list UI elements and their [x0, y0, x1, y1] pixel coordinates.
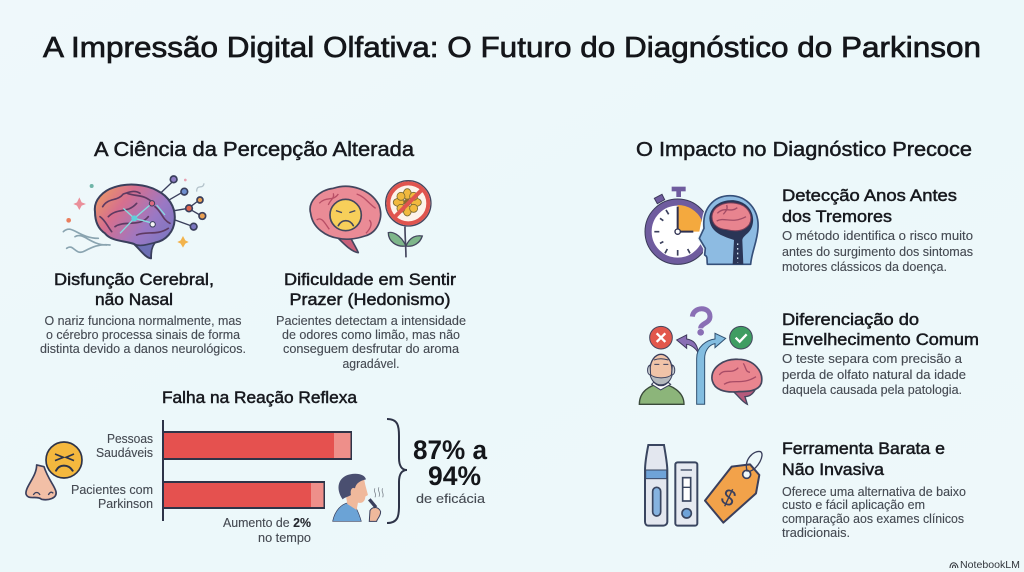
- text: diferenciação do envelhecimento: Envelhecimento Comum: [782, 330, 979, 349]
- annotation: aumento de 2% no tempo: [223, 516, 311, 545]
- icon: disgusted face and nose: [26, 442, 82, 500]
- category labels: [71, 432, 153, 511]
- category labels: Pacientes com: [71, 483, 153, 497]
- title: A Impressão Digital Olfativa: O Futuro do Diagnóstico do Parkinson: [43, 32, 981, 64]
- text: detecção anos antes: Detecção Anos Antes: [782, 186, 957, 205]
- text: dificuldade em sentir prazer: de odores como limão, mas não: [282, 328, 460, 342]
- text: diferenciação do envelhecimento: daquela causada pela patologia.: [782, 383, 962, 397]
- category labels: Parkinson: [98, 497, 153, 511]
- subheading: dificuldade em sentir prazer: Dificuldade em Sentir: [284, 270, 456, 289]
- text: diferenciação do envelhecimento: Diferenciação do: [782, 310, 919, 329]
- brace: [387, 419, 407, 523]
- text: diferenciação do envelhecimento: O teste separa com precisão a: [782, 352, 962, 366]
- text: disfunção cerebral: O nariz funciona normalmente, mas: [44, 314, 242, 328]
- category labels: Saudáveis: [96, 446, 153, 460]
- text: detecção anos antes: O método identifica o risco muito: [782, 229, 973, 243]
- bar: pessoas saudáveis: [163, 432, 351, 459]
- text: detecção anos antes: motores clássicos da doença.: [782, 260, 947, 274]
- text: detecção anos antes: antes do surgimento dos sintomas: [782, 245, 973, 259]
- icon: colorful brain with network nodes: [63, 176, 206, 258]
- stat: 87% a 94% de eficácia: [413, 435, 488, 506]
- icon: stopwatch and head with brain: [645, 189, 758, 264]
- text: ferramenta barata: comparação aos exames clínicos: [782, 512, 964, 526]
- stat: 87% a 94% de eficácia: 94%: [428, 461, 481, 491]
- text: detecção anos antes: [782, 186, 973, 274]
- text: ferramenta barata: Oferece uma alternativa de baixo: [782, 485, 966, 499]
- text: disfunção cerebral: o cérebro processa sinais de forma: [46, 328, 240, 342]
- subheading: dificuldade em sentir prazer: [284, 270, 456, 309]
- icon: sad brain and crossed flower: [310, 181, 431, 257]
- text: dificuldade em sentir prazer: Pacientes detectam a intensidade: [276, 314, 466, 328]
- text: dificuldade em sentir prazer: agradável.: [342, 357, 400, 371]
- subheading: disfunção cerebral: [54, 270, 214, 309]
- text: diferenciação do envelhecimento: [782, 310, 979, 397]
- subheading: disfunção cerebral: Disfunção Cerebral,: [54, 270, 214, 289]
- chart heading: falha na reação reflexa: Falha na Reação Reflexa: [162, 388, 358, 407]
- panel: o impacto no diagnóstico precoce: [636, 139, 979, 540]
- text: diferenciação do envelhecimento: perda de olfato natural da idade: [782, 368, 966, 382]
- annotation: aumento de 2% no tempo: Aumento de 2%: [223, 516, 311, 530]
- stat: 87% a 94% de eficácia: de eficácia: [416, 492, 485, 506]
- text: ferramenta barata: Não Invasiva: [782, 460, 885, 479]
- panel: a ciência da percepção alterada: [26, 139, 488, 545]
- text: disfunção cerebral: [40, 314, 246, 356]
- icon: test kits and price tag: $: [717, 483, 740, 512]
- bar chart: reação reflexa: [71, 420, 351, 521]
- text: ferramenta barata: Ferramenta Barata e: [782, 439, 945, 458]
- heading: o impacto: O Impacto no Diagnóstico Precoce: [636, 139, 972, 161]
- text: dificuldade em sentir prazer: conseguem desfrutar do aroma: [283, 342, 459, 356]
- text: detecção anos antes: dos Tremores: [782, 207, 892, 226]
- subheading: dificuldade em sentir prazer: Prazer (Hedonismo): [290, 290, 450, 309]
- icon: diverging paths, elder and brain: [639, 309, 762, 404]
- icon: test kits and price tag: [645, 445, 762, 526]
- bar: pacientes com parkinson: [163, 482, 324, 508]
- text: ferramenta barata: [782, 439, 966, 540]
- text: disfunção cerebral: distinta devido a danos neurológicos.: [40, 342, 246, 356]
- stat: 87% a 94% de eficácia: 87% a: [413, 435, 488, 465]
- heading: a ciência: A Ciência da Percepção Alterada: [94, 139, 415, 161]
- icon: man sniffing a test stick: [333, 474, 383, 521]
- watermark: notebooklm: NotebookLM: [960, 559, 1020, 571]
- text: ferramenta barata: custo e fácil aplicação em: [782, 498, 925, 512]
- subheading: disfunção cerebral: não Nasal: [95, 290, 173, 309]
- category labels: Pessoas: [107, 432, 153, 446]
- text: ferramenta barata: tradicionais.: [782, 526, 850, 540]
- annotation: aumento de 2% no tempo: no tempo: [258, 531, 311, 545]
- text: dificuldade em sentir prazer: [276, 314, 466, 371]
